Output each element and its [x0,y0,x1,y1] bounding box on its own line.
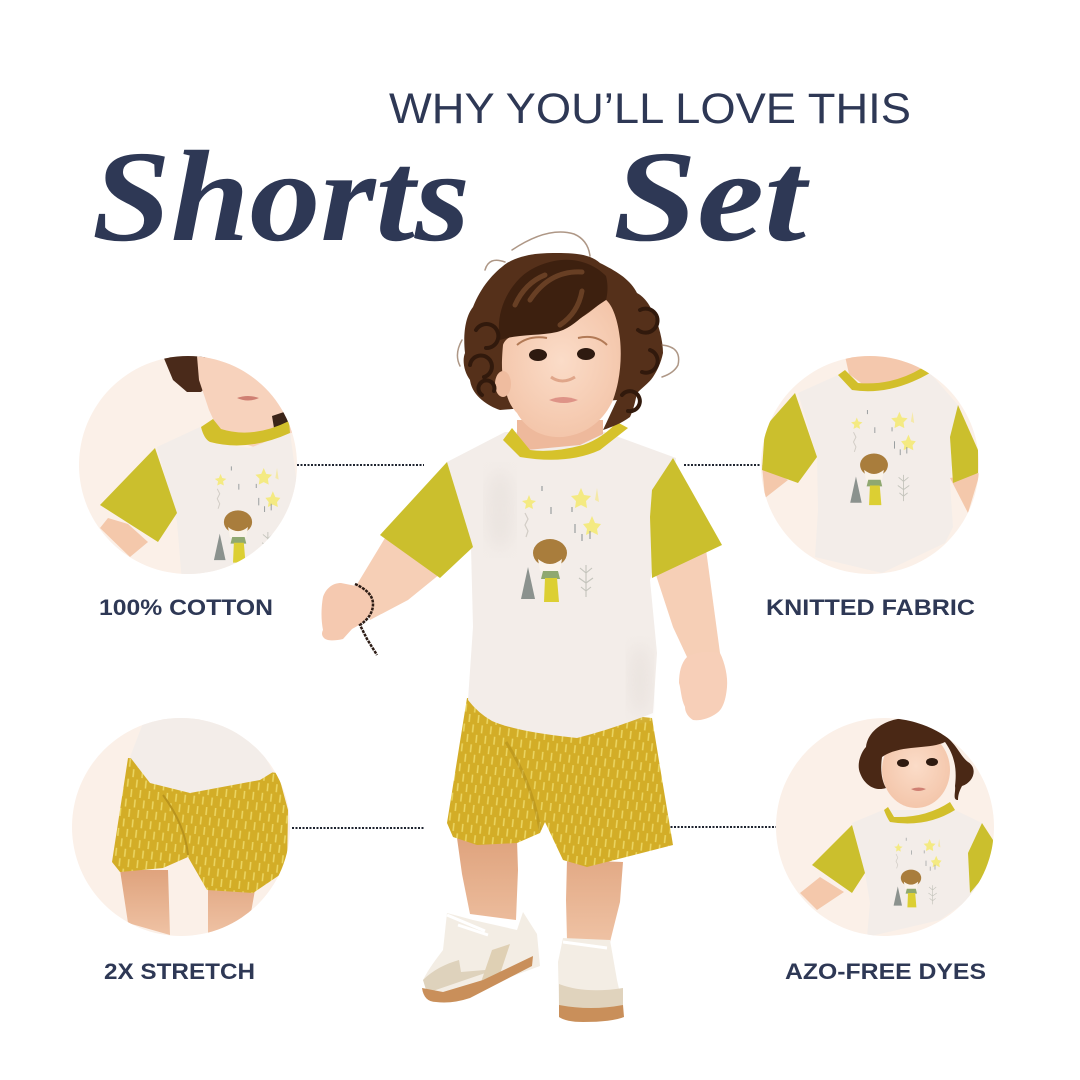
legs [457,838,623,942]
circle: azo-free dyes detail [776,718,994,937]
eyes [529,348,595,361]
hair back [464,253,663,430]
neck [517,420,603,450]
face [502,299,621,437]
right hand [679,652,727,720]
title: shorts set [92,125,811,269]
left arm [356,538,440,620]
circle: 100% cotton detail [79,356,310,582]
bangs [499,260,608,340]
labels: 2X STRETCH [104,959,255,984]
collar [503,422,628,460]
title: shorts set: Shorts [92,125,470,269]
brows [517,337,607,345]
shorts [447,698,673,867]
right arm [655,542,720,657]
bracelet [355,584,377,655]
shirt print [521,486,601,602]
t-shirt [447,432,676,738]
face [882,744,950,808]
left sleeve [380,462,473,578]
mouth [549,397,578,403]
heading: why you'll love this: WHY YOU’LL LOVE THIS [389,86,911,133]
connector lines [292,465,776,828]
labels: 100% COTTON [99,595,273,620]
circle: knitted fabric detail [761,356,980,574]
nose [551,377,575,381]
curls [457,232,679,411]
hair [859,718,974,800]
labels [99,595,986,984]
right sleeve [650,458,722,578]
child figure [322,232,727,1022]
circle: 2x stretch detail [72,718,290,936]
right shoe [558,938,624,1022]
left shoe [422,912,540,1002]
ear [495,371,511,397]
labels: KNITTED FABRIC [766,595,975,620]
left fist [322,583,372,640]
labels: AZO-FREE DYES [785,959,986,984]
title: shorts set: Set [613,125,811,269]
